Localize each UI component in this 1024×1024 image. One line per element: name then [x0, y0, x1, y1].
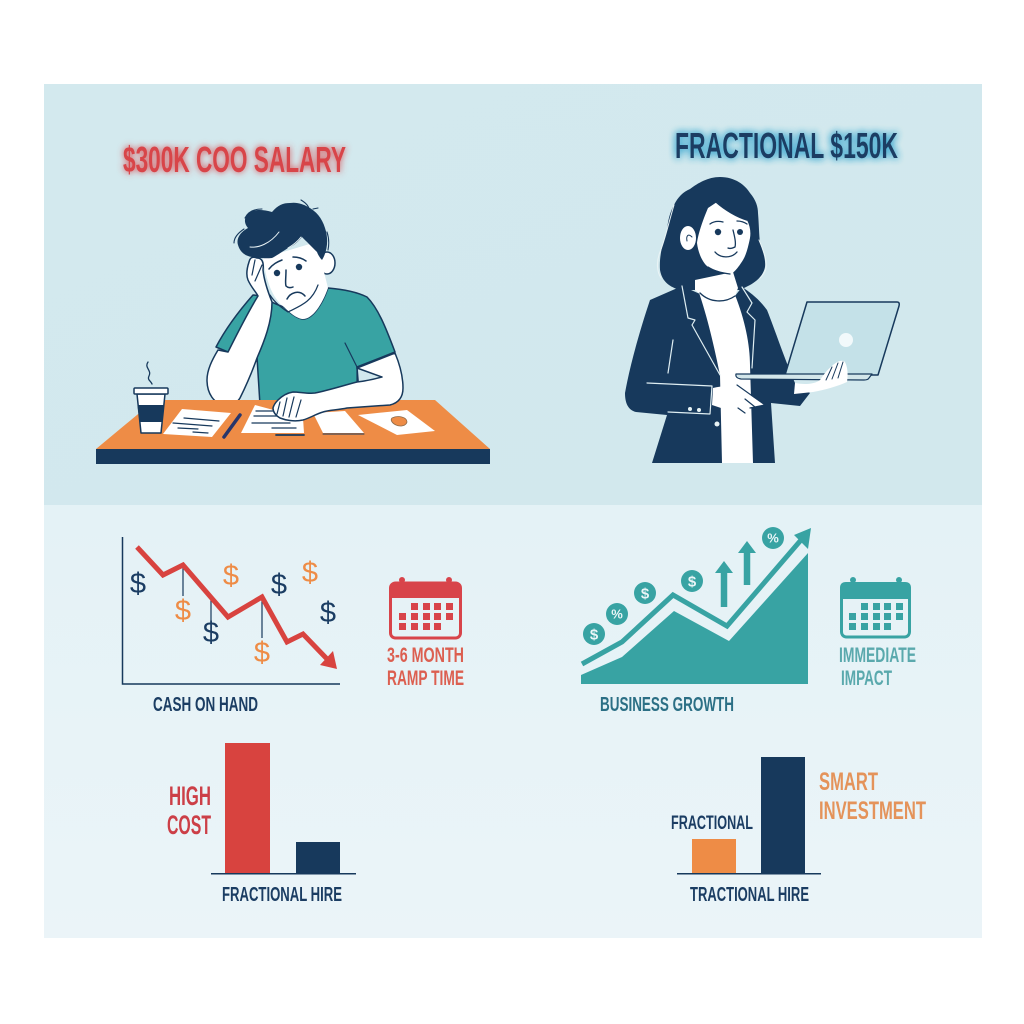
arrowhead [320, 651, 337, 669]
dollar signs: $ [320, 597, 336, 629]
up arrows [724, 552, 747, 607]
label: immediate impact [839, 644, 916, 690]
man: shirt sleeve crease [345, 343, 357, 382]
woman: pointing hand [712, 385, 765, 415]
woman: jacket [625, 286, 810, 463]
label: smart investment: INVESTMENT [819, 797, 926, 825]
stems [183, 566, 262, 638]
label: business growth: BUSINESS GROWTH [600, 694, 734, 716]
paper 3 [313, 411, 364, 434]
falling red line [137, 547, 328, 660]
woman: white shirt [698, 290, 753, 463]
laptop [736, 302, 899, 380]
chart: business growth area: $ [688, 574, 697, 590]
chart: business growth area [581, 527, 811, 684]
coins [583, 527, 784, 645]
growth line [582, 540, 801, 664]
label: fractional: FRACTIONAL [671, 813, 753, 834]
label: fractional hire: FRACTIONAL HIRE [222, 884, 342, 906]
woman: jacket buttons [688, 407, 720, 426]
bar chart: fractional vs smart investment [677, 757, 821, 874]
coffee cup with steam [134, 362, 168, 433]
label: 3-6 month ramp time [387, 644, 464, 690]
man: hair [237, 203, 327, 260]
bar: full-time [761, 757, 805, 873]
icon: red calendar [390, 577, 461, 638]
chart: business growth area: % [611, 606, 623, 622]
dollar signs: $ [175, 595, 191, 627]
dollar signs [130, 557, 336, 669]
chart: business growth area: $ [590, 626, 599, 644]
panel: bottom charts background [44, 505, 982, 938]
label: immediate impact: IMMEDIATE [839, 644, 916, 667]
illustration: confident woman with laptop [625, 177, 899, 463]
label: 3-6 month ramp time: RAMP TIME [387, 667, 464, 690]
bar: fractional [692, 839, 736, 873]
baseline [677, 873, 821, 874]
baseline [211, 873, 356, 874]
line arrowhead [794, 528, 811, 549]
man: desk table [96, 400, 490, 464]
dollar signs: $ [254, 637, 270, 669]
paper 1 [163, 409, 231, 437]
label: immediate impact: IMPACT [841, 667, 892, 690]
title: fractional $150K: FRACTIONAL $150K [675, 125, 898, 166]
label: cash on hand: CASH ON HAND [153, 694, 258, 716]
dollar signs: $ [223, 560, 239, 592]
pen [224, 415, 240, 437]
label: 3-6 month ramp time: 3-6 MONTH [387, 644, 464, 667]
paper 2 [241, 405, 304, 435]
bar: fractional [296, 842, 340, 873]
label: high cost: HIGH [169, 781, 211, 811]
man: head and face [234, 200, 335, 319]
woman: hand holding laptop [794, 361, 848, 394]
dollar signs: $ [271, 569, 287, 601]
man: supporting arm and hand [207, 257, 272, 405]
chart: cash on hand falling line [122, 537, 340, 684]
woman: hair [660, 177, 765, 290]
label: smart investment: SMART [819, 768, 878, 796]
woman: neck and face [680, 202, 750, 301]
paper 4 with stain [358, 410, 435, 435]
illustration: stressed man at desk [96, 200, 490, 464]
chart: business growth area: $ [641, 586, 650, 602]
title: $300K COO salary: $300K COO SALARY [123, 139, 346, 180]
growth area [581, 553, 808, 684]
man: shirt [216, 288, 395, 405]
man: right arm and hand on paper [273, 353, 403, 421]
bar: high cost [225, 743, 270, 873]
label: smart investment [819, 768, 926, 825]
label: high cost [167, 781, 211, 840]
panel: top comparison background [44, 84, 982, 505]
dollar signs: $ [130, 568, 146, 600]
woman: jacket lapels and cuff lines [647, 286, 755, 414]
woman: hair highlight outline [657, 205, 766, 278]
label: tractional hire: TRACTIONAL HIRE [690, 884, 809, 906]
axes [122, 537, 340, 684]
dollar signs: $ [203, 617, 219, 649]
bar chart: high cost vs fractional hire [211, 743, 356, 874]
chart: business growth area: % [767, 530, 779, 546]
dollar signs: $ [302, 557, 318, 589]
label: high cost: COST [167, 810, 211, 840]
man: face features [274, 270, 280, 276]
icon: teal calendar [840, 577, 911, 637]
